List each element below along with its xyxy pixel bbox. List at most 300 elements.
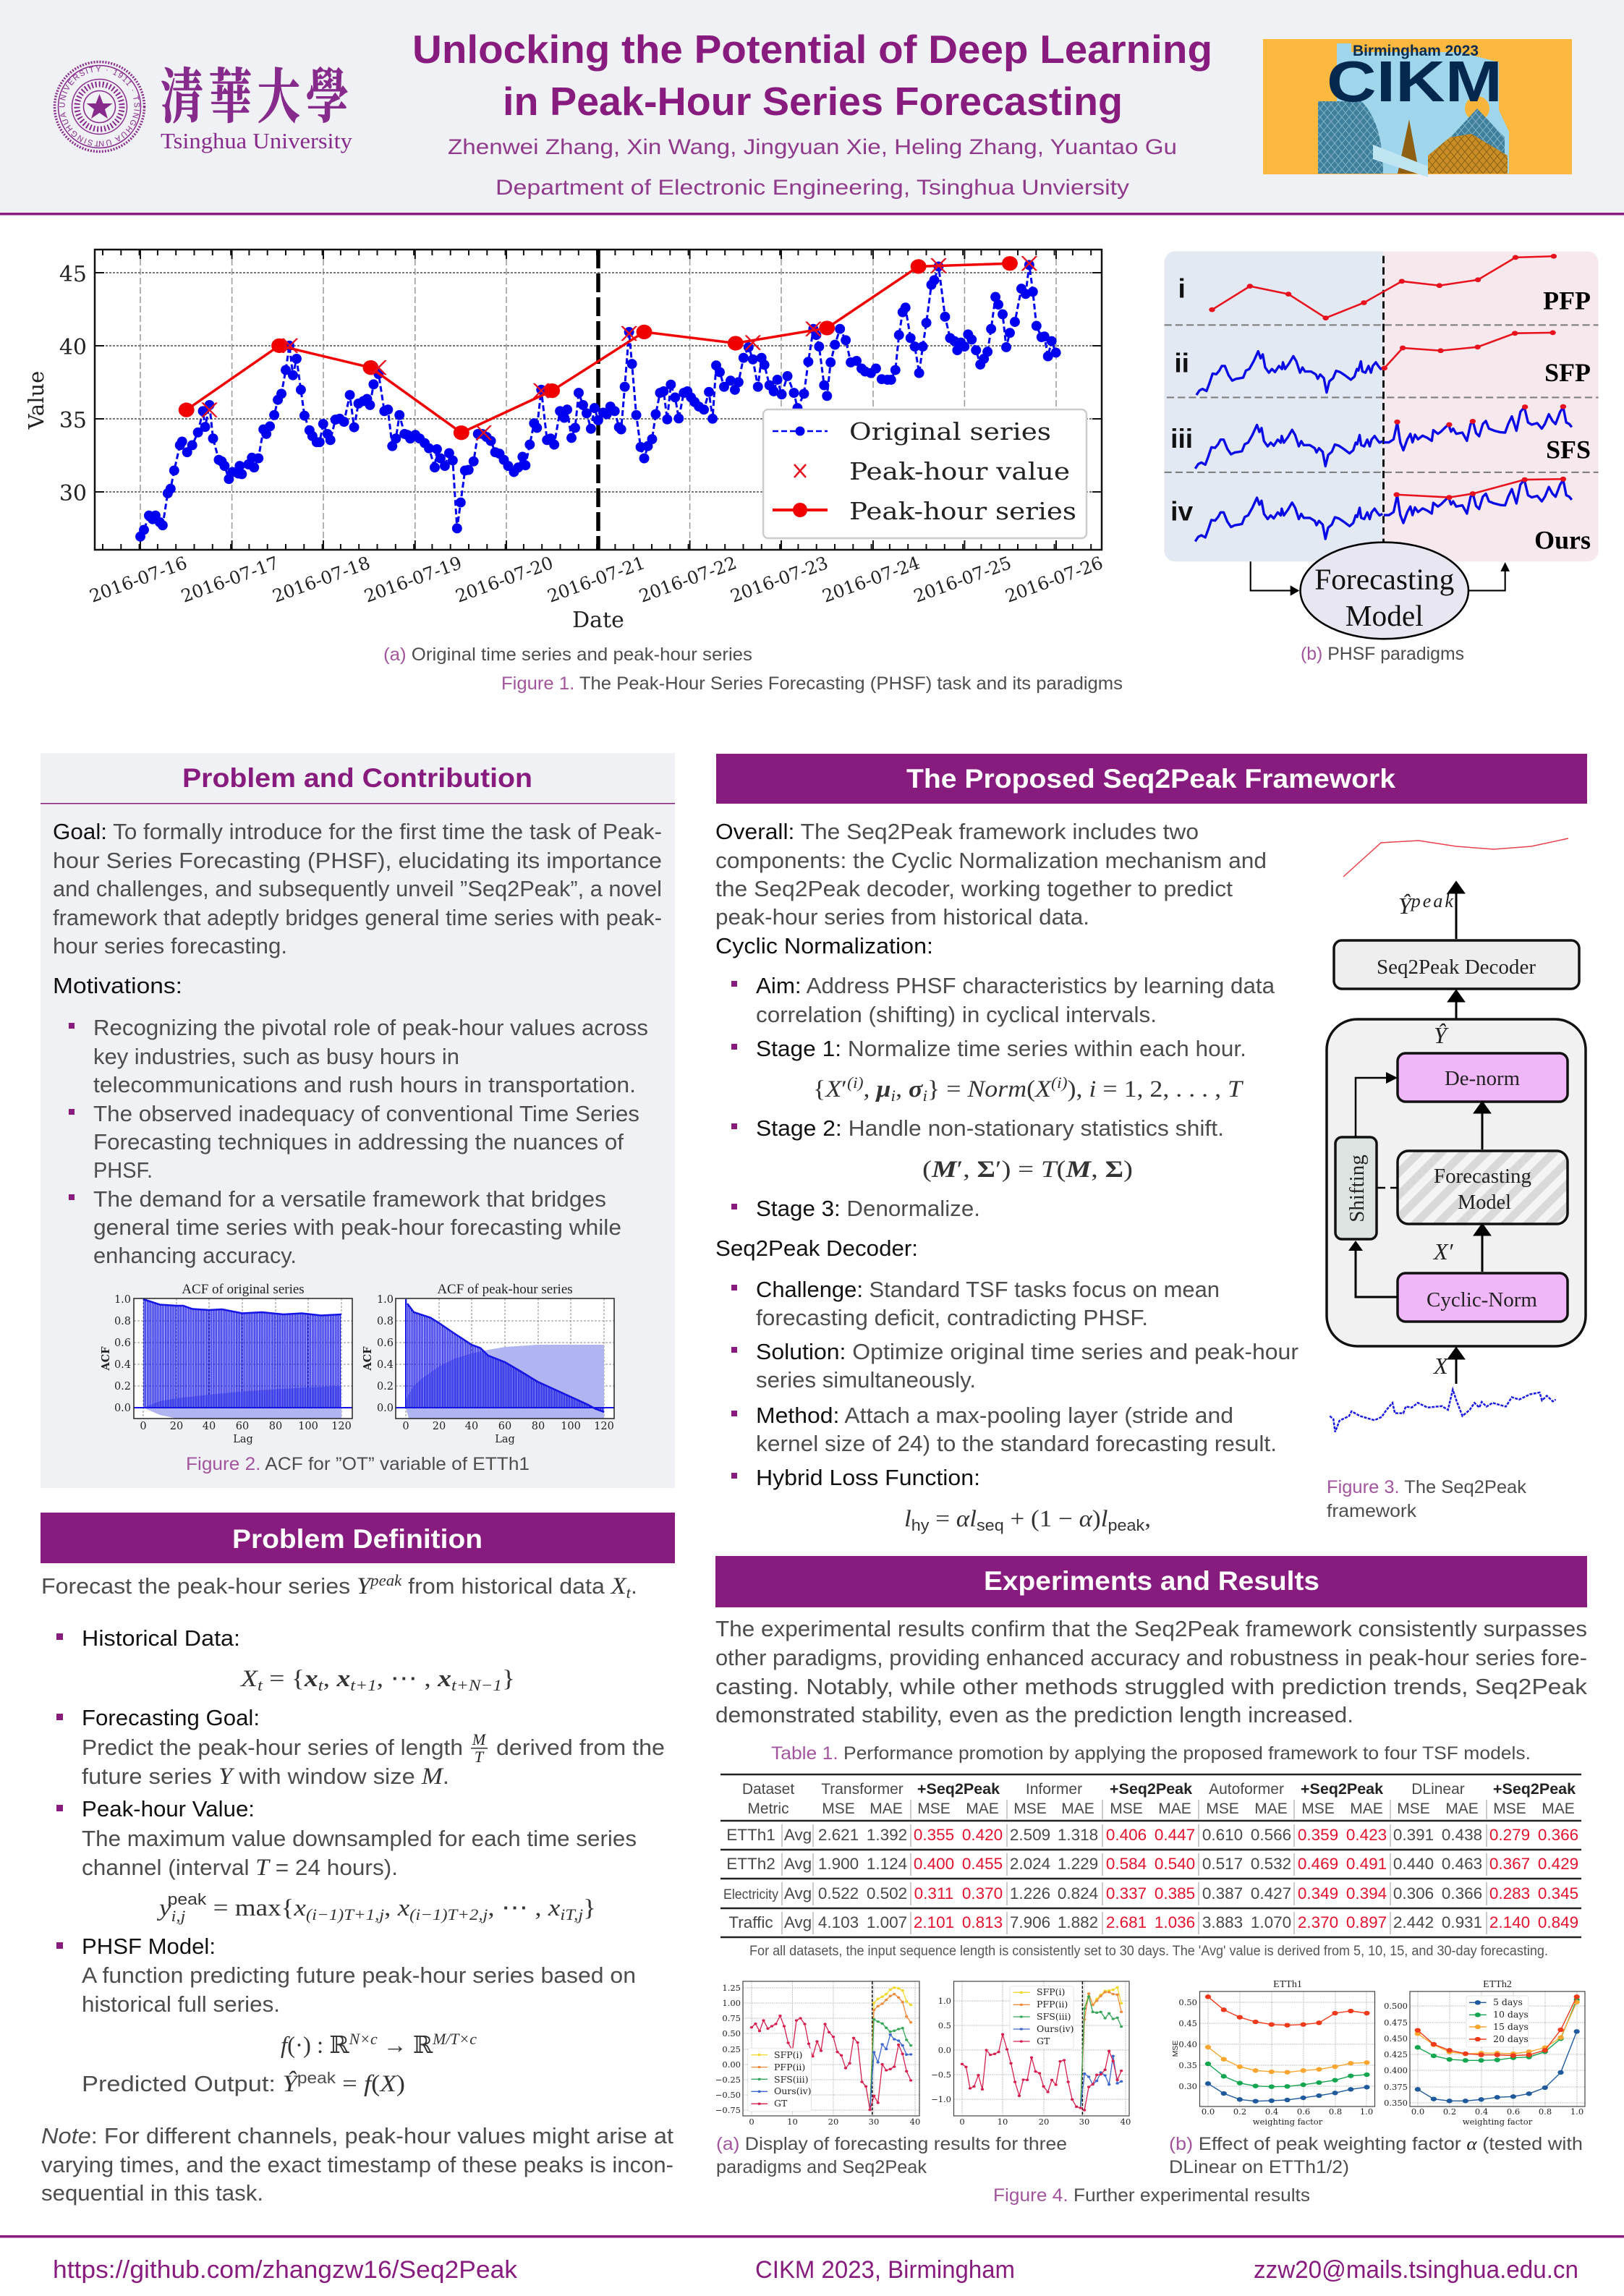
chart: ACF of original series: 40 [203,1421,216,1432]
chart: ETTh1 weighting factor: 0.45 [1178,2018,1197,2028]
heading: problem and contribution: Problem and Contribution [182,763,532,793]
original series [140,263,1056,537]
table row: ETTh1 [726,1826,1578,1844]
formula: model mapping: f(·) : ℝ [281,2033,349,2059]
table row: Traffic: 1.882 [1058,1913,1098,1931]
formula: historical data: = { [263,1666,305,1692]
chart: ACF of peak-hour series: 80 [532,1421,545,1432]
formula: normalization: i = 1, 2, . . . , T [1089,1076,1241,1102]
chart: ETTh1 weighting factor: MSE [1171,2041,1180,2057]
chart: forecasting results 1: Ours(iv) [774,2085,812,2096]
text block: results summary: casting. Notably, while other methods struggled with prediction trends, Seq2Peak [715,1674,1588,1699]
box: shifting [1335,1137,1377,1239]
arrow: shifting to de-norm [1356,1072,1398,1137]
table row: Electricity: 0.366 [1442,1884,1482,1902]
text block: definition intro: peak [369,1571,403,1589]
list: definitions: channel (interval T = 24 hours). [82,1855,398,1881]
table row: Electricity: 0.349 [1298,1884,1338,1902]
legend: Original series [849,417,1051,446]
table header: MSE [1013,1800,1047,1817]
panel: the proposed Seq2Peak framework [715,754,1587,1534]
caption: figure 3: Figure 3. The Seq2Peak [1327,1477,1527,1497]
formula: peak value: (i−1)T+2,j [409,1905,488,1923]
list: definitions: derived from the [496,1735,665,1760]
caption: figure 4a: (a) Display of forecasting results for three [716,2134,1067,2154]
table row: ETTh2: 0.491 [1346,1855,1387,1873]
chart: ACF of original series: 0.0 [114,1403,131,1414]
list: motivations: PHSF. [93,1157,153,1183]
row iii: SFS [1170,407,1591,469]
chart: forecasting results 2: 40 [1121,2117,1131,2127]
formula: historical data: , [323,1666,336,1692]
box: Seq2Peak decoder: Seq2Peak Decoder [1377,956,1536,979]
row iv: ours: iv [1170,496,1193,527]
text block: Seq2Peak decoder: Challenge: Standard TSF tasks focus on mean [756,1277,1220,1302]
formula: peak value: iT,j [560,1905,583,1923]
text block: goal: hour series forecasting. [53,933,287,958]
chart: ACF of peak-hour series: 120 [594,1421,614,1432]
chart: ETTh2 weighting factor: 0.350 [1384,2098,1408,2108]
heading: motivations: Motivations: [53,973,182,998]
formula: hybrid loss: αl [956,1506,977,1532]
caption: figure 1a: (a) Original time series and peak-hour series [383,645,752,665]
formula: historical data: t+N−1 [451,1676,502,1694]
table header: Autoformer [1209,1781,1284,1798]
formula: normalization: (i) [847,1073,864,1092]
table row: ETTh1: ETTh1 [726,1826,775,1844]
table row: Electricity [723,1884,1578,1902]
chart: ACF of original series: 1.0 [114,1294,131,1306]
table header: Informer [1026,1781,1082,1798]
chart: ETTh2 weighting factor: 0.4 [1475,2106,1488,2117]
formula: peak value: , [384,1895,398,1921]
logo wordmark english: Tsinghua University [161,128,353,153]
chart: ETTh2 weighting factor: 0.8 [1539,2106,1552,2117]
table row: ETTh2 [726,1855,1578,1873]
table row: ETTh2: 0.532 [1251,1855,1291,1873]
table row: ETTh1: 2.509 [1010,1826,1050,1844]
caption: figure 1: Figure 1. The Peak-Hour Series Forecasting (PHSF) task and its paradigms [501,673,1123,694]
text block: cyclic normalization: correlation (shifting) in cyclical intervals. [756,1002,1157,1027]
caption: figure 4a: paradigms and Seq2Peak [716,2157,927,2177]
box: forecasting model: Model [1458,1191,1511,1214]
x-axis date labels: 2016-07-18 [270,552,373,607]
table row: Electricity: 0.522 [818,1884,859,1902]
table row: ETTh2: 0.455 [962,1855,1003,1873]
chart: ACF of peak-hour series: ACF [362,1346,374,1372]
label: predicted peak: Ŷ [1398,893,1411,919]
chart: forecasting results 1: 1.00 [722,1998,741,2008]
formula: normalization: , [864,1076,876,1102]
row i: PFP: i [1178,273,1186,304]
table row: ETTh1: 0.610 [1202,1826,1243,1844]
input series [1330,1390,1556,1432]
x-axis date labels [87,552,1105,633]
text block: Seq2Peak decoder: kernel size of 24) to the standard forecasting result. [756,1431,1277,1456]
table row: Electricity: 0.311 [914,1884,953,1902]
text block: cyclic normalization: Stage 1: Normalize time series within each hour. [756,1036,1246,1061]
caption: figure 4b [1169,2134,1583,2177]
text block: definition intro: . [631,1573,637,1599]
formula: normalization: μ [875,1076,890,1102]
chart: ACF of peak-hour series: ACF of peak-hour series [437,1282,573,1297]
heading: problem definition: Problem Definition [232,1524,482,1554]
table row: Traffic: 2.101 [914,1913,954,1931]
formula: hybrid loss: = [929,1506,956,1532]
title: in Peak-Hour Series Forecasting [503,79,1123,124]
row i: PFP [1178,256,1591,318]
formula: fraction M over T [471,1730,488,1766]
chart: forecasting results 1: 0.50 [722,2028,741,2038]
table row: ETTh2: 1.124 [867,1855,907,1873]
chart: forecasting results 1: −0.25 [715,2075,741,2085]
chart: forecasting results 1: GT [774,2098,788,2109]
chart: ETTh1 weighting factor: 0.4 [1265,2106,1278,2117]
chart: ETTh2 weighting factor: 0.0 [1411,2106,1424,2117]
chart: ETTh1 weighting factor: weighting factor [1253,2117,1323,2127]
footer: CIKM 2023, Birmingham [755,2256,1015,2284]
list: motivations: enhancing accuracy. [93,1243,297,1268]
chart: ETTh2 weighting factor: 0.2 [1443,2106,1456,2117]
chart: forecasting results 2: 0 [959,2117,965,2127]
chart: forecasting results 1: 20 [828,2117,838,2127]
chart: forecasting results 2: PFP(ii) [1037,1999,1068,2010]
formula: fraction M over T: M [472,1730,487,1748]
chart: ETTh2 weighting factor: 10 days [1493,2009,1529,2020]
formula: hybrid loss: + (1 − [1004,1506,1079,1532]
chart: ETTh2 weighting factor [1384,1979,1585,2127]
chart: ACF of original series: 120 [331,1421,352,1432]
chart: ACF of original series: ACF of original series [182,1282,305,1297]
x-axis date labels: Date [572,608,624,633]
panel: problem and contribution [41,753,675,1488]
text block: cyclic normalization: Stage 2: Handle non-stationary statistics shift. [756,1115,1224,1141]
chart: ACF of peak-hour series: 0.6 [377,1338,394,1349]
formula: hybrid loss: seq [977,1516,1004,1534]
header banner [0,0,1624,216]
row iii: SFS: iii [1170,423,1193,454]
chart: ETTh1 weighting factor [1171,1979,1374,2127]
table row: Traffic: 0.849 [1538,1913,1578,1931]
chart: ETTh2 weighting factor: ETTh2 [1483,1979,1512,1990]
table row: Traffic: 1.036 [1155,1913,1195,1931]
text block: overall: Overall: The Seq2Peak framework includes two [715,819,1199,844]
chart: forecasting results 1: 30 [869,2117,879,2127]
table row: ETTh2: 0.463 [1442,1855,1482,1873]
table row: Electricity: 1.226 [1010,1884,1050,1902]
logo: CIKM 2023 Birmingham: Birmingham 2023 [1353,43,1479,59]
chart: ETTh2 weighting factor: 0.375 [1384,2082,1408,2092]
formula: peak value: x [397,1895,410,1921]
x-axis date labels: 2016-07-25 [911,552,1014,607]
text block: cyclic normalization [715,933,1275,1221]
text block: results summary [715,1616,1588,1727]
chart: ETTh2 weighting factor: 15 days [1493,2021,1529,2032]
chart: ACF of peak-hour series: 60 [498,1421,511,1432]
chart: forecasting results 2: GT [1037,2036,1050,2046]
chart: ACF of peak-hour series: 0 [402,1421,409,1432]
chart: forecasting results 2: 0.0 [938,2045,951,2055]
table row: ETTh2: 1.900 [818,1855,859,1873]
formula: peak value: i,j [171,1907,185,1925]
formula: normalization: (i) [1051,1073,1068,1092]
chart: ACF of original series: 100 [298,1421,318,1432]
text block: cyclic normalization: Aim: Address PHSF characteristics by learning data [756,973,1275,998]
x-axis date labels: 2016-07-17 [178,552,281,607]
chart: ACF of original series: 0.4 [114,1359,131,1371]
chart: forecasting results 1: 1.25 [722,1983,741,1993]
chart: ACF of original series: 0.8 [114,1316,131,1327]
arrow: cyclic-norm to shifting [1348,1241,1398,1297]
forecasting model ellipse: Model [1345,599,1424,632]
chart: forecasting results 1: 40 [910,2117,920,2127]
logo: Tsinghua University [54,50,354,153]
table row: ETTh1: 2.621 [818,1826,859,1844]
formula: historical data: x [304,1666,318,1692]
text block: Seq2Peak decoder: forecasting deficit, contradicting PHSF. [756,1305,1148,1330]
table row: ETTh1: 0.279 [1489,1826,1530,1844]
formula: historical data: t [258,1676,263,1694]
table header: MAE [1254,1800,1288,1817]
caption: figure 2: Figure 2. ACF for ”OT” variable of ETTh1 [186,1454,530,1474]
formula: peak value: (i−1)T+1,j [306,1905,384,1923]
table row: Traffic: 0.897 [1346,1913,1387,1931]
table header [742,1780,1576,1817]
panel: problem definition [41,1513,675,2206]
chart: ETTh2 weighting factor: 5 days [1493,1997,1523,2007]
table header: Transformer [821,1781,904,1798]
box: forecasting model [1398,1151,1568,1224]
table row: ETTh2: 0.584 [1106,1855,1147,1873]
table row: ETTh2: 0.429 [1538,1855,1578,1873]
table header: MAE [1445,1800,1479,1817]
chart: original time series and peak-hour series [24,250,1105,633]
legend: Peak-hour value [849,457,1070,485]
chart: ACF of original series: Lag [233,1434,253,1445]
chart: ETTh2 weighting factor: 0.475 [1384,2017,1408,2028]
table row: ETTh1: 1.392 [867,1826,907,1844]
chart: ACF of original series: 0.2 [114,1381,131,1393]
y-axis labels [24,262,87,506]
list: motivations: telecommunications and rush hours in transportation. [93,1072,636,1097]
table row: ETTh1: 0.355 [914,1826,954,1844]
list: motivations: Recognizing the pivotal role of peak-hour values across [93,1015,648,1040]
table row: Electricity: 0.283 [1489,1884,1530,1902]
y-axis labels: 35 [59,408,87,433]
arrow: to decoder [1449,991,1463,1019]
formula: historical data: t [318,1676,324,1694]
formula: historical data: x [437,1666,451,1692]
peak-hour output series [1343,838,1568,877]
table row: Traffic [728,1913,1578,1931]
formula: peak value: , ⋯ , [488,1895,548,1921]
table row: Traffic: 2.140 [1489,1913,1530,1931]
text block: overall: components: the Cyclic Normalization mechanism and [715,848,1267,873]
formula: normalization: } = [927,1076,967,1102]
icon: Tsinghua seal [54,61,146,153]
text block: overall: peak-hour series from historical data. [715,904,1089,930]
chart: forecasting results 1: 0.25 [722,2044,741,2054]
table row: ETTh2: 0.517 [1202,1855,1243,1873]
caption: figure 4b: DLinear on ETTh1/2) [1169,2157,1349,2177]
list: definitions: Forecasting Goal: [82,1705,260,1730]
row iv: ours: Ours [1534,526,1591,555]
forecasting model ellipse [1301,543,1468,639]
text block: goal: hour Series Forecasting (PHSF), elucidating its importance [53,848,662,873]
chart: forecasting results 2: 1.0 [938,1996,951,2006]
chart: forecasting results 2 [931,1981,1131,2127]
chart: forecasting results 1: 0.00 [722,2059,741,2070]
authors: Zhenwei Zhang, Xin Wang, Jingyuan Xie, Heling Zhang, Yuantao Gu [448,135,1177,159]
chart: ETTh2 weighting factor: 0.425 [1384,2049,1408,2059]
list: motivations: The demand for a versatile framework that bridges [93,1186,606,1212]
text block: note: sequential in this task. [41,2180,263,2206]
table row: ETTh2: ETTh2 [726,1855,775,1873]
heading: proposed framework: The Proposed Seq2Peak Framework [906,764,1395,794]
table row: Electricity: 0.387 [1202,1884,1243,1902]
x-axis date labels: 2016-07-24 [820,552,922,607]
label: input: X [1432,1353,1449,1379]
chart: ACF of original series: 0 [140,1421,147,1432]
y-axis labels: 40 [59,335,87,360]
arrow: input [1449,1348,1463,1384]
table row: ETTh1: 0.366 [1538,1826,1578,1844]
table row: ETTh2: 0.540 [1155,1855,1195,1873]
diagram: Seq2Peak framework [1327,838,1586,1432]
y-axis labels: 30 [59,481,87,506]
table row: ETTh1: 0.447 [1155,1826,1195,1844]
list: definitions: historical full series. [82,1991,280,2017]
row i: PFP: PFP [1543,286,1591,315]
table row: ETTh2: 0.400 [914,1855,954,1873]
x-axis date labels: 2016-07-21 [545,552,647,607]
table row: Electricity: 0.345 [1538,1884,1578,1902]
chart: forecasting results 2: Ours(iv) [1037,2023,1074,2034]
table row: ETTh1: 0.406 [1106,1826,1147,1844]
logo: CIKM 2023 Birmingham: CIKM [1327,49,1502,114]
legend [763,409,1087,538]
text block: goal [53,819,662,958]
table row: Traffic: 2.370 [1298,1913,1338,1931]
title [412,27,1212,124]
table row: ETTh1: 0.438 [1442,1826,1482,1844]
box: forecasting model: Forecasting [1434,1165,1531,1188]
list: motivations: Forecasting techniques in addressing the nuances of [93,1129,624,1155]
chart: forecasting results 2: 10 [998,2117,1008,2127]
text block: overall: the Seq2Peak decoder, working together to predict [715,876,1233,901]
legend [1010,1986,1074,2049]
chart: ETTh2 weighting factor: weighting factor [1463,2117,1533,2127]
table row: Traffic: 0.931 [1442,1913,1482,1931]
table header: +Seq2Peak [1493,1780,1576,1798]
table row: Traffic: 0.813 [962,1913,1003,1931]
arrow: model to output [1468,562,1510,590]
chart: forecasting results 1: PFP(ii) [774,2062,805,2072]
chart: forecasting results 1 [715,1981,920,2127]
chart: forecasting results 1: −0.50 [715,2090,741,2100]
x-axis date labels: 2016-07-26 [1003,552,1105,607]
formula: normalization: Norm(X [967,1076,1050,1102]
chart: ETTh1 weighting factor: 0.8 [1329,2106,1342,2117]
chart: forecasting results 2: 30 [1079,2117,1089,2127]
row iv: ours [1170,479,1591,555]
box: de-norm [1398,1053,1568,1102]
legend: Peak-hour series [849,497,1076,525]
chart: forecasting results 2: SFP(i) [1037,1986,1065,1997]
x-axis date labels: 2016-07-22 [636,552,739,607]
formula: model mapping: → ℝ [378,2033,433,2059]
chart: ETTh2 weighting factor: 0.6 [1507,2106,1520,2117]
chart: ACF of peak-hour series [362,1282,614,1445]
formula: predicted output: f(X) [364,2071,404,2097]
text block: definition intro: X [610,1573,628,1599]
table row: ETTh2: 0.440 [1393,1855,1434,1873]
chart: ETTh2 weighting factor: 0.450 [1384,2033,1408,2044]
chart: ACF of original series: ACF [100,1346,112,1372]
caption: figure 4a [716,2134,1067,2177]
formula: historical data: t+1 [350,1676,377,1694]
arrow: model to de-norm [1475,1102,1489,1149]
heading: experiments and results: Experiments and Results [984,1566,1319,1596]
formula: hybrid loss: , [1144,1506,1151,1532]
chart: ACF of original series: 80 [269,1421,282,1432]
table header: MAE [1542,1800,1575,1817]
chart: ACF of peak-hour series: 1.0 [377,1294,394,1306]
formula: historical data: X [239,1666,259,1692]
table row: ETTh1: 0.359 [1298,1826,1338,1844]
formula: model mapping: N×c [349,2030,378,2048]
legend [1466,1996,1529,2047]
text block: Seq2Peak decoder: Method: Attach a max-pooling layer (stride and [756,1403,1233,1428]
arrow: input to model [1251,561,1299,596]
chart: forecasting results 2: 0.5 [938,2020,951,2031]
text block: Seq2Peak decoder: Hybrid Loss Function: [756,1465,980,1490]
chart: ETTh1 weighting factor: 1.0 [1360,2106,1373,2117]
table row: Traffic: 2.442 [1393,1913,1434,1931]
table row: ETTh2: 1.229 [1058,1855,1098,1873]
caption: figure 4: Figure 4. Further experimental results [993,2185,1310,2206]
panel: experiments and results [715,1556,1588,2206]
chart: forecasting results 1: 10 [787,2117,798,2127]
text block: cyclic normalization: Cyclic Normalization: [715,933,933,958]
chart: ACF of peak-hour series: 0.4 [377,1359,394,1371]
table header: MAE [1158,1800,1191,1817]
table row: ETTh1: 0.391 [1393,1826,1434,1844]
chart: ETTh2 weighting factor: 0.400 [1384,2065,1408,2075]
formula: historical data: , ⋯ , [377,1666,438,1692]
formula: predicted output: Predicted Output: Ŷ [82,2071,296,2097]
table row: ETTh1: 1.318 [1058,1826,1098,1844]
text block: overall [715,819,1267,930]
table row: Traffic: 4.103 [818,1913,859,1931]
table header: Dataset [742,1781,794,1798]
table row: ETTh1: 0.420 [962,1826,1003,1844]
list: motivations: The observed inadequacy of conventional Time Series [93,1101,639,1126]
row ii: SFP: SFP [1544,358,1591,387]
box: cyclic-norm [1398,1273,1568,1322]
chart: ETTh2 weighting factor: 0.500 [1384,2001,1408,2011]
box: normalization module: Ŷ [1434,1022,1449,1048]
table header: +Seq2Peak [917,1780,1000,1798]
table header: +Seq2Peak [1301,1780,1383,1798]
formula: predicted output: = [336,2071,364,2097]
table header: MSE [1110,1800,1143,1817]
text block: goal: Goal: To formally introduce for the first time the task of Peak- [53,819,662,844]
formula: model mapping: M/T×c [432,2030,477,2048]
table row: Electricity: 0.502 [867,1884,907,1902]
list: definitions: future series Y with window size M. [82,1764,449,1790]
chart: forecasting results 2: SFS(iii) [1037,2011,1071,2022]
